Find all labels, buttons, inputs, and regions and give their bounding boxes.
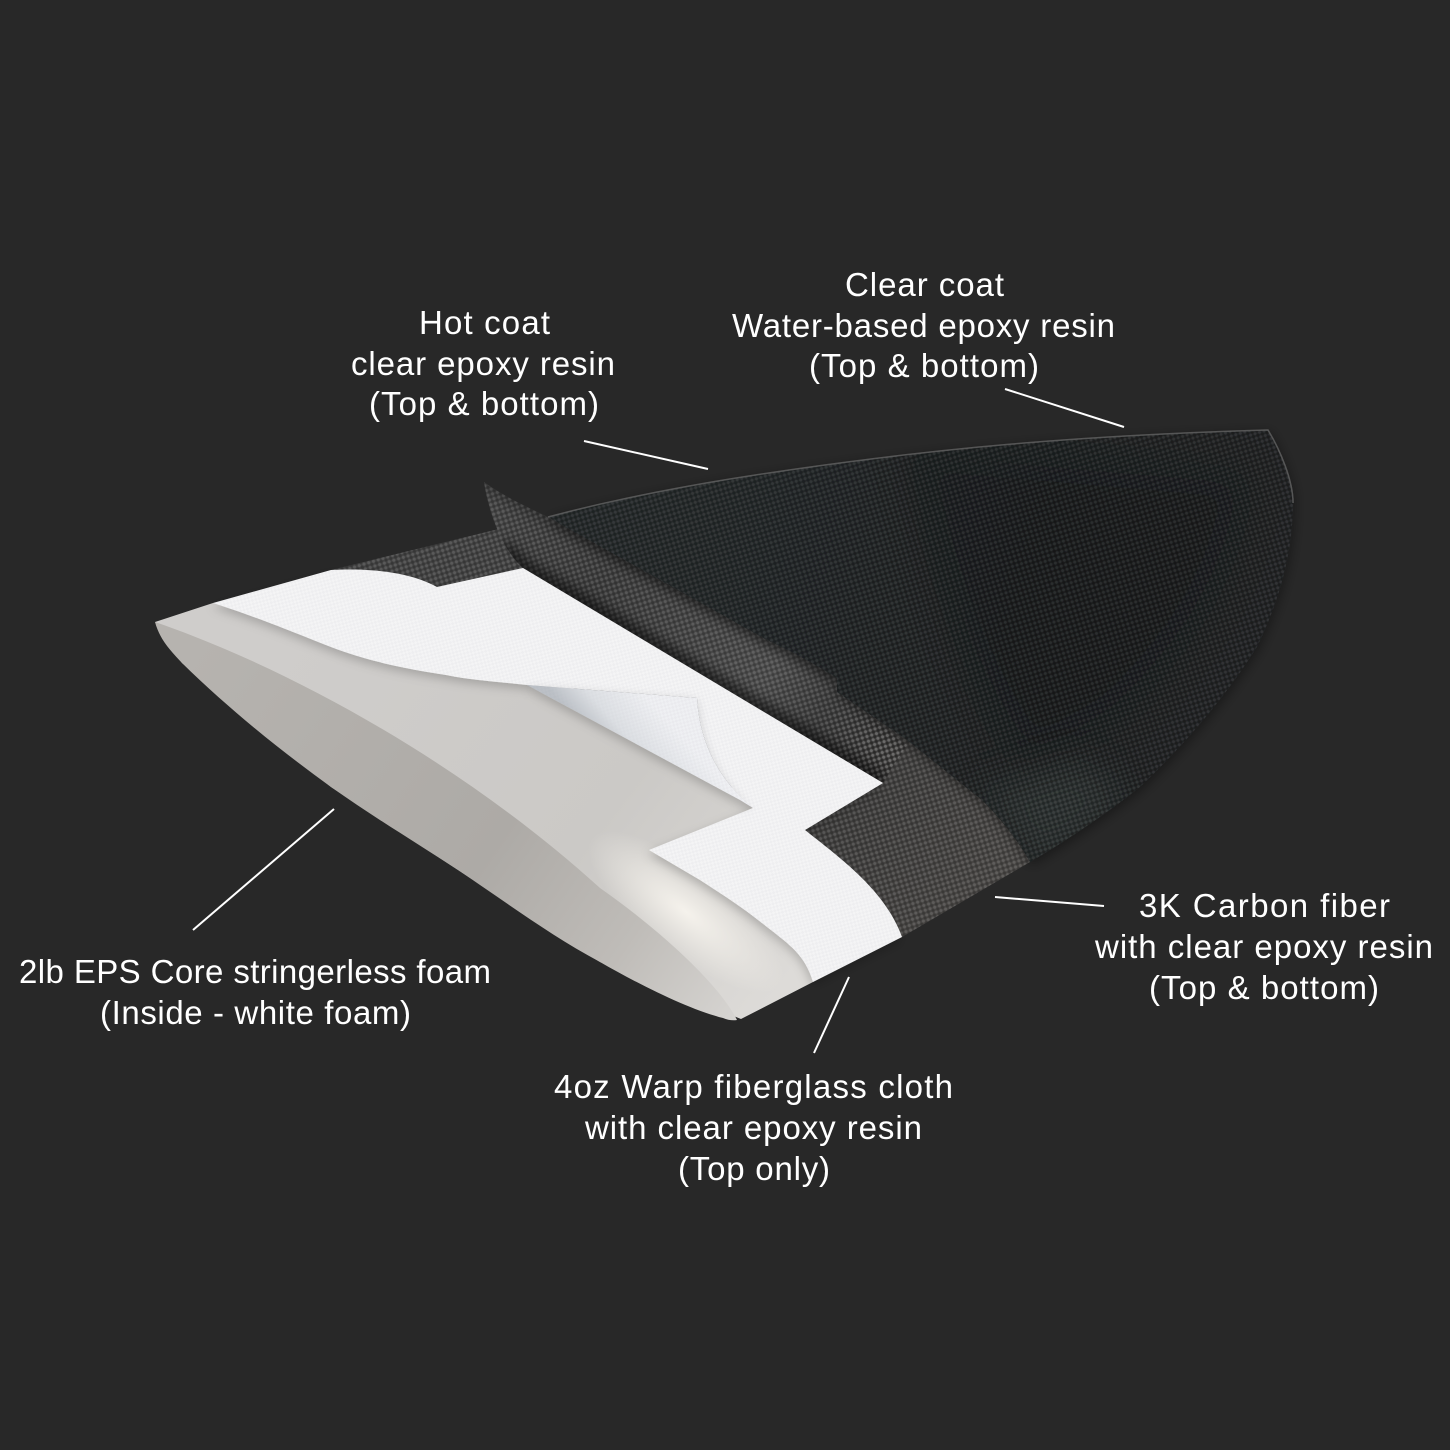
label: fiberglass cloth: (Top only) [678,1150,830,1187]
label: carbon fiber: with clear epoxy resin [1094,928,1433,965]
label: hot coat [351,304,615,422]
label: hot coat: clear epoxy resin [351,345,615,382]
leader line: carbon fiber [995,897,1104,906]
label: fiberglass cloth: 4oz Warp fiberglass cloth [554,1068,953,1105]
label: clear coat: Water-based epoxy resin [732,307,1115,344]
label: fiberglass cloth: with clear epoxy resin [584,1109,922,1146]
peeled clear coat flap [484,482,907,783]
leader line: fiberglass cloth [814,977,849,1053]
label: hot coat: Hot coat [419,304,550,341]
top carbon panel with clear coat [548,430,1293,870]
foam highlight [155,603,820,1019]
label: carbon fiber: (Top & bottom) [1149,969,1379,1006]
label: EPS core: 2lb EPS Core stringerless foam [19,953,491,990]
illustration: layered board cutaway [155,430,1293,1020]
label: EPS core: (Inside - white foam) [100,994,411,1031]
foam core top surface [155,603,820,1019]
foam core side [155,622,737,1020]
label: clear coat: Clear coat [845,266,1004,303]
label: clear coat: (Top & bottom) [809,347,1039,384]
label: EPS core [19,953,491,1031]
label: fiberglass cloth [554,1068,953,1187]
carbon fiber layer [331,517,1030,937]
fiberglass sheet [213,568,902,982]
leader line: EPS core [193,809,334,930]
label: clear coat [732,266,1115,384]
label: carbon fiber: 3K Carbon fiber [1139,887,1390,924]
label: carbon fiber [1094,887,1433,1006]
leader line: hot coat [584,441,708,469]
curled sheet corner [527,685,753,808]
leader line: clear coat [1005,389,1124,427]
label: hot coat: (Top & bottom) [369,385,599,422]
